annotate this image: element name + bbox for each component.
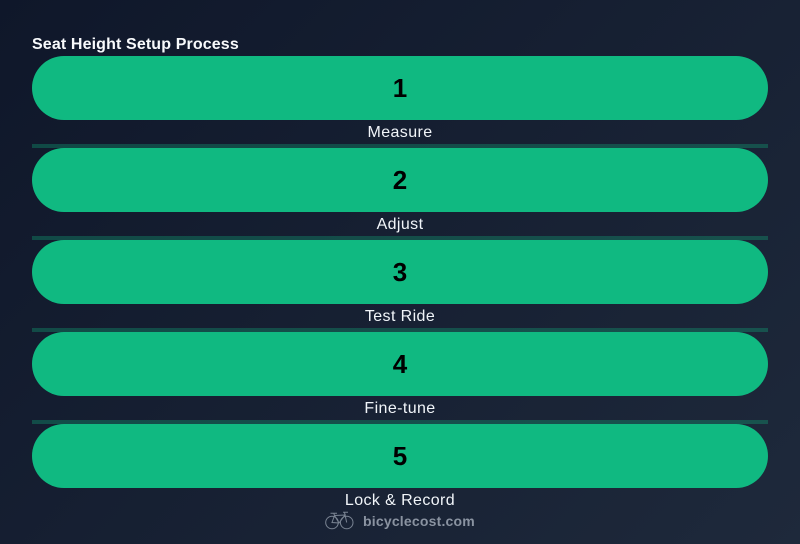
- step 4: Fine-tune: [32, 332, 768, 417]
- step 1 number pill: [32, 56, 768, 120]
- step 4 number pill: [32, 332, 768, 396]
- step 3 number pill: 3: [393, 257, 407, 287]
- step 4 number pill: 4: [393, 349, 407, 379]
- step 2 label: Adjust: [377, 216, 423, 233]
- connector 1: [32, 144, 768, 148]
- brand watermark: bicyclecost.com: [363, 513, 475, 529]
- step 3: Test Ride: [32, 240, 768, 325]
- step 1: Measure: [32, 56, 768, 141]
- step 2: Adjust: [32, 148, 768, 233]
- step 3 number pill: [32, 240, 768, 304]
- step 5 label: Lock & Record: [345, 492, 455, 509]
- step 5 number pill: 5: [393, 441, 407, 471]
- step 2 number pill: [32, 148, 768, 212]
- step 3 label: Test Ride: [365, 308, 435, 325]
- connector 3: [32, 328, 768, 332]
- icon: bicycle: [325, 512, 354, 530]
- step 5: Lock & Record: [32, 424, 768, 509]
- connector 4: [32, 420, 768, 424]
- step 5 number pill: [32, 424, 768, 488]
- title: Seat Height Setup Process: [32, 36, 239, 53]
- connector 2: [32, 236, 768, 240]
- step 4 label: Fine-tune: [364, 400, 436, 417]
- step 1 label: Measure: [367, 124, 433, 141]
- step 2 number pill: 2: [393, 165, 407, 195]
- step 1 number pill: 1: [393, 73, 407, 103]
